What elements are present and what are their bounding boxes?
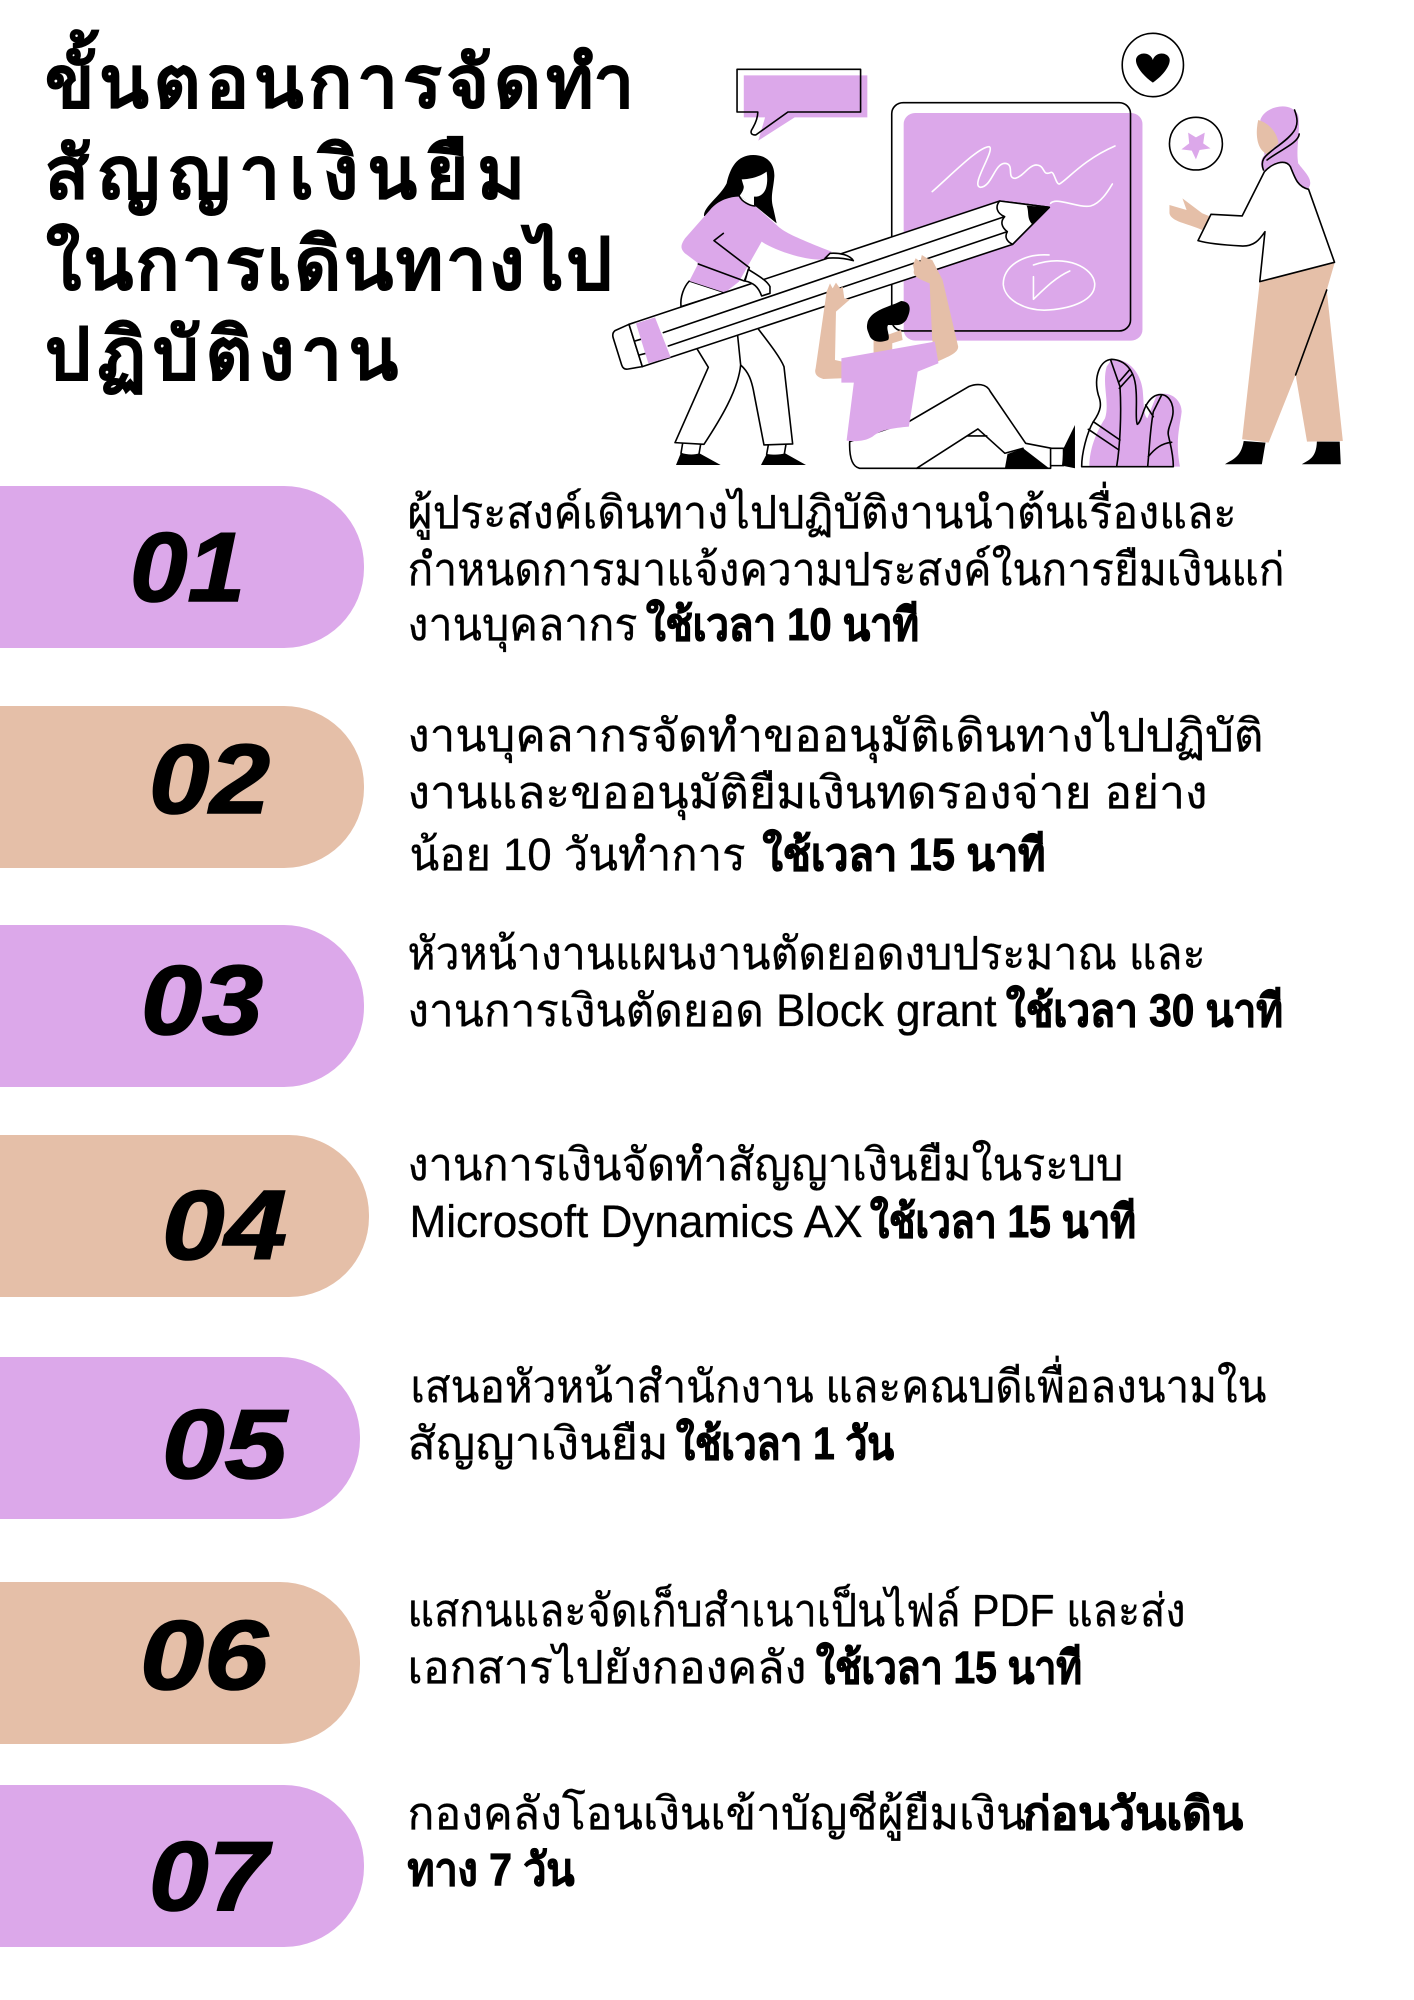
step 02 text (408, 710, 1264, 880)
step 04 text (408, 1139, 1136, 1247)
title: ในการเดินทางไป (46, 222, 612, 305)
step 01 text: งานบุคลากร (408, 599, 638, 652)
step 04 text: ใช้เวลา 15 นาที (870, 1195, 1136, 1247)
step 03 text: งานการเงินตัดยอด Block grant (408, 985, 997, 1036)
document board (892, 103, 1142, 341)
step 03 (0, 925, 1283, 1087)
title: ปฏิบัติงาน (45, 315, 398, 395)
step 05 text (408, 1355, 1266, 1469)
step 01 text: ผู้ประสงค์เดินทางไปปฏิบัติงานนำต้นเรื่องและ (408, 481, 1236, 540)
step 06 text: แสกนและจัดเก็บสำเนาเป็นไฟล์ PDF และส่ง (408, 1584, 1186, 1636)
step 05 text: ใช้เวลา 1 วัน (676, 1417, 894, 1469)
step 07 (0, 1785, 1243, 1947)
step 02 (0, 706, 1264, 880)
step 03 text: หัวหน้างานแผนงานตัดยอดงบประมาณ และ (408, 928, 1206, 979)
number pill 03: 03 (141, 945, 263, 1055)
icon: plant (1082, 359, 1182, 467)
step 07 text: ก่อนวันเดิน (1023, 1788, 1243, 1839)
number pill 07 (0, 1785, 364, 1947)
step 06 text: เอกสารไปยังกองคลัง (408, 1642, 806, 1693)
step 06 text (408, 1584, 1186, 1693)
number pill 04 (0, 1135, 369, 1297)
number pill 05 (0, 1357, 360, 1519)
step 06 text: ใช้เวลา 15 นาที (816, 1641, 1082, 1693)
icon: star badge (1169, 117, 1222, 170)
step 05 (0, 1355, 1266, 1519)
figure: woman holding pencil (675, 155, 832, 465)
number pill 07: 07 (149, 1821, 273, 1931)
step 01 text: ใช้เวลา 10 นาที (646, 598, 919, 650)
number pill 06: 06 (140, 1600, 270, 1710)
figure: seated man lifting pencil (815, 255, 1075, 468)
step 03 text: ใช้เวลา 30 นาที (1006, 984, 1283, 1036)
number pill 02: 02 (149, 724, 270, 834)
number pill 06 (0, 1582, 360, 1744)
step 06 (0, 1582, 1186, 1744)
step 03 text (408, 928, 1283, 1036)
number pill 05: 05 (162, 1389, 289, 1499)
number pill 02 (0, 706, 364, 868)
step 04 (0, 1135, 1136, 1297)
step 07 text: กองคลังโอนเงินเข้าบัญชีผู้ยืมเงิน (408, 1788, 1026, 1841)
number pill 04: 04 (162, 1170, 287, 1280)
icon: speech bubble (737, 69, 867, 141)
step 04 text: งานการเงินจัดทำสัญญาเงินยืมในระบบ (408, 1139, 1124, 1190)
figure: woman in hijab (1169, 106, 1343, 464)
step 02 text: งานและขออนุมัติยืมเงินทดรองจ่าย อย่าง (408, 767, 1208, 820)
number pill 03 (0, 925, 364, 1087)
step 01 text (408, 481, 1284, 652)
illustration: team signing a document with a giant pencil (613, 33, 1343, 468)
icon: giant pencil (613, 201, 1049, 369)
step 02 text: ใช้เวลา 15 นาที (762, 828, 1046, 880)
number pill 01: 01 (130, 512, 245, 622)
number pill 01 (0, 486, 364, 648)
title: ขั้นตอนการจัดทำ (45, 29, 634, 123)
title (45, 29, 634, 395)
step 01 (0, 481, 1284, 652)
step 02 text: น้อย 10 วันทำการ (410, 829, 746, 880)
step 04 text: Microsoft Dynamics AX (410, 1196, 862, 1247)
step 05 text: เสนอหัวหน้าสำนักงาน และคณบดีเพื่อลงนามใน (410, 1355, 1266, 1412)
icon: heart badge (1122, 33, 1183, 97)
step 05 text: สัญญาเงินยืม (408, 1418, 668, 1469)
step 02 text: งานบุคลากรจัดทำขออนุมัติเดินทางไปปฏิบัติ (408, 710, 1264, 763)
step 07 text: ทาง 7 วัน (408, 1844, 575, 1895)
step 07 text (408, 1788, 1243, 1895)
title: สัญญาเงินยืม (45, 134, 525, 216)
step 01 text: กำหนดการมาแจ้งความประสงค์ในการยืมเงินแก่ (408, 544, 1284, 595)
